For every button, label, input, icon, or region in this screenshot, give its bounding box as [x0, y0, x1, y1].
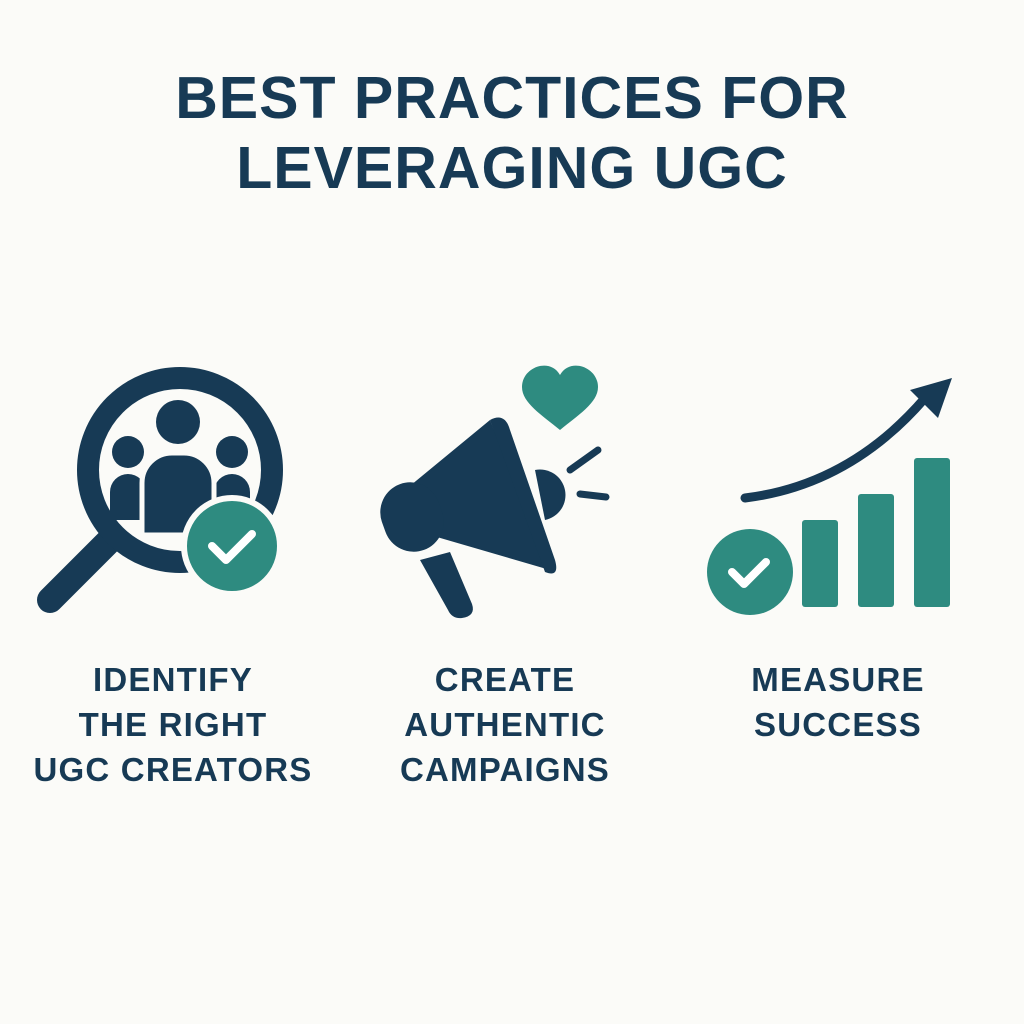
icon: magnifier with people	[50, 378, 280, 600]
label: measure: SUCCESS	[754, 706, 922, 743]
label: create: CAMPAIGNS	[400, 751, 610, 788]
label: create: AUTHENTIC	[404, 706, 606, 743]
label: identify: UGC CREATORS	[33, 751, 313, 788]
title: BEST PRACTICES FOR	[175, 65, 849, 131]
label: identify: THE RIGHT	[79, 706, 267, 743]
icon: check badge	[184, 498, 280, 594]
label: measure	[751, 661, 925, 743]
label: measure: MEASURE	[751, 661, 925, 698]
title: LEVERAGING UGC	[236, 135, 788, 201]
label: create: CREATE	[435, 661, 575, 698]
label: create	[400, 661, 610, 788]
icon: megaphone with heart	[372, 366, 606, 618]
icon: bar chart with arrow	[707, 378, 952, 615]
label: identify	[33, 661, 313, 788]
label: identify: IDENTIFY	[93, 661, 253, 698]
title	[175, 65, 849, 201]
